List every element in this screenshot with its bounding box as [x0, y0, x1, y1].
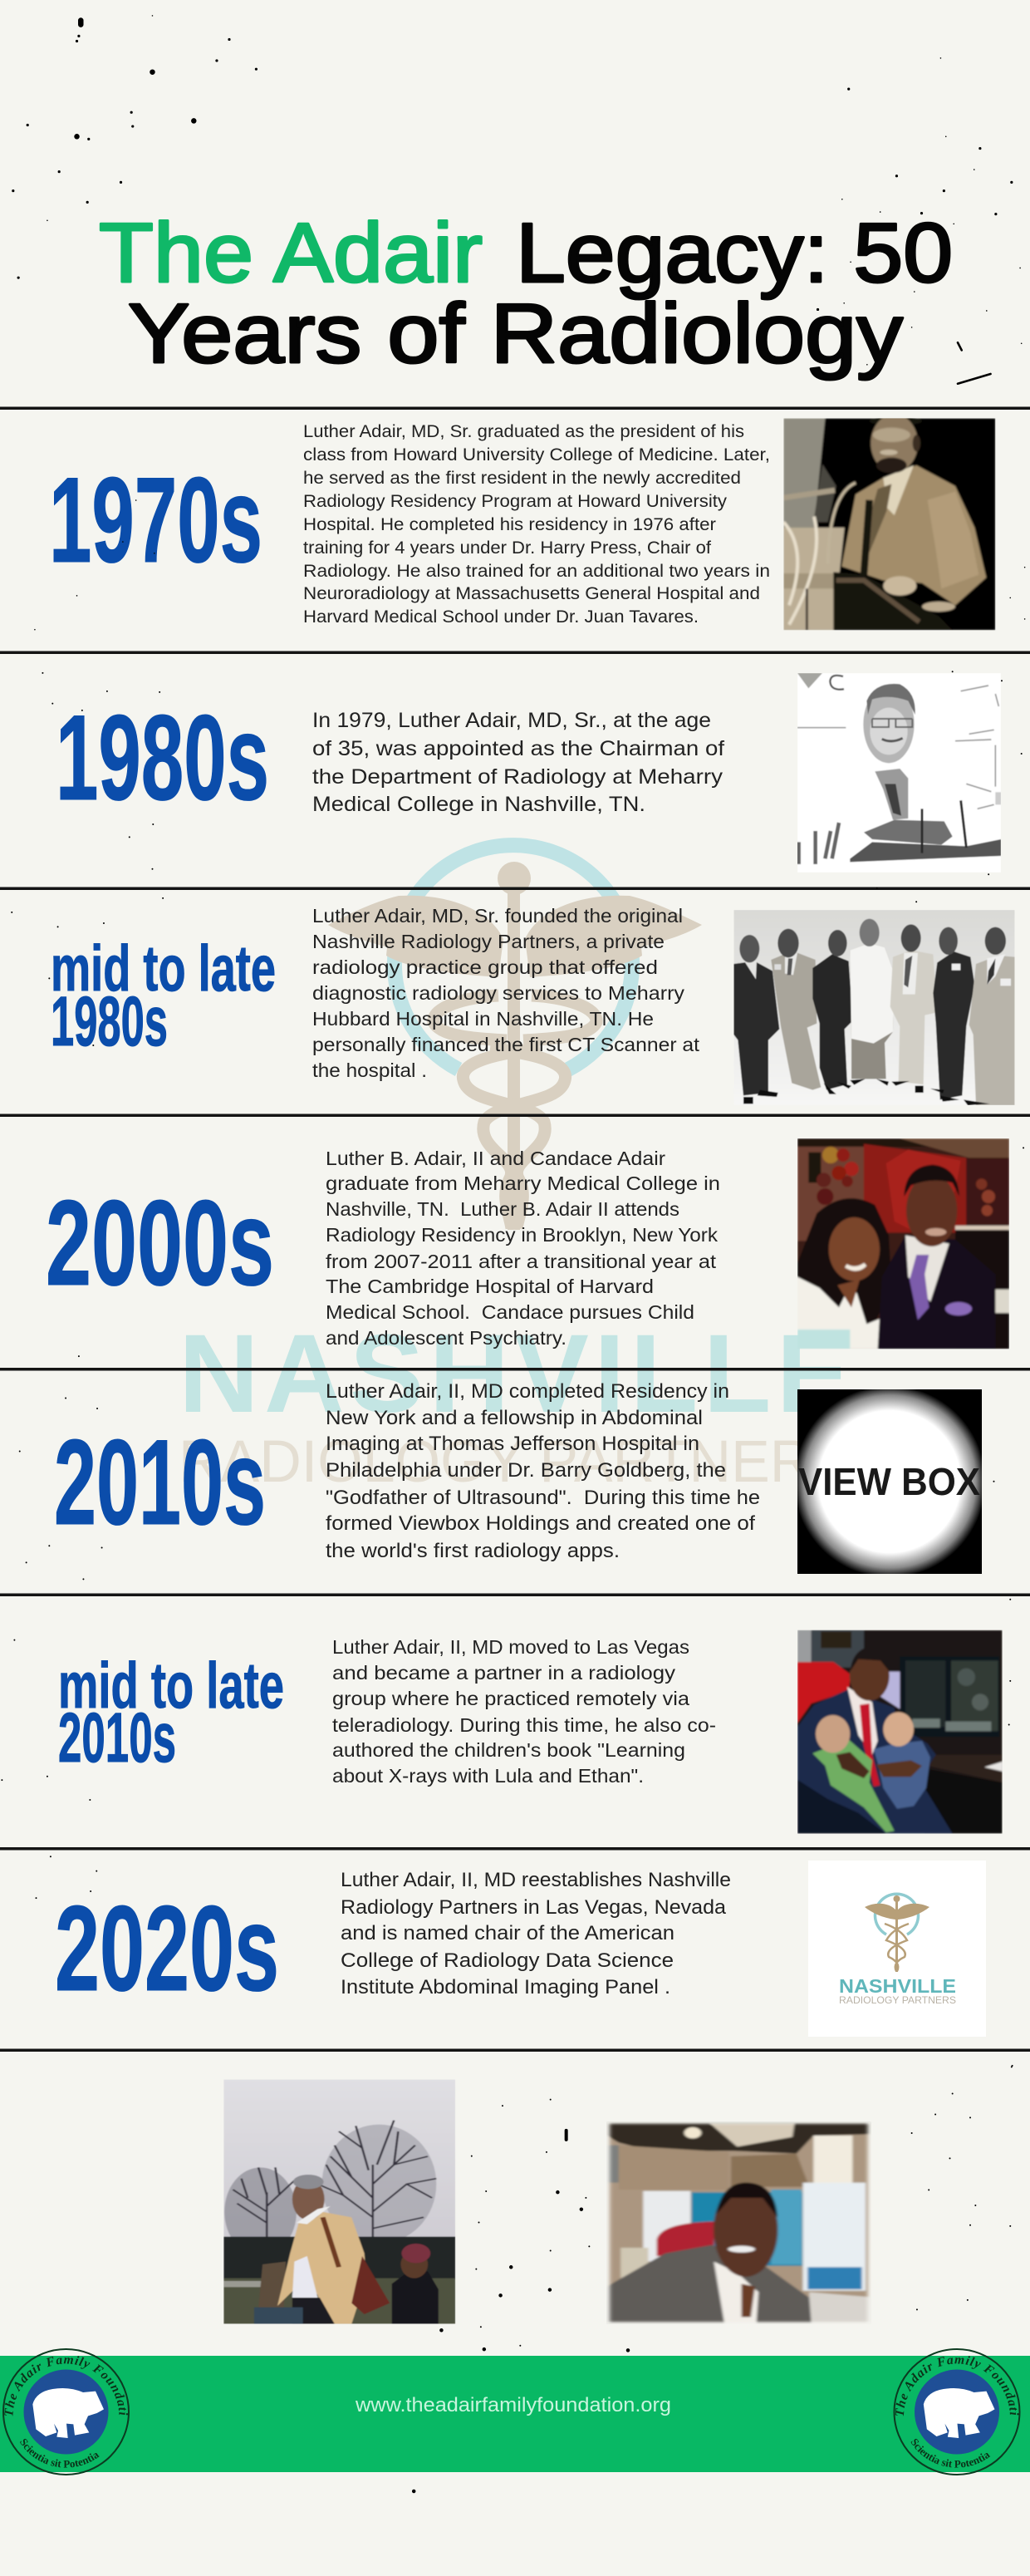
text block 2000s: from 2007-2011 after a transitional year at	[326, 1251, 716, 1272]
logo wordmark RADIOLOGY PARTNERS: RADIOLOGY PARTNERS	[839, 1994, 956, 2006]
panel: mid to late 1980s	[51, 905, 1015, 1105]
text block 2010s: the world's first radiology apps.	[326, 1540, 620, 1562]
emblem: Adair Family Foundation left: The Adair Family Foundation	[4, 2356, 128, 2416]
photo: Luther Adair at his desk	[797, 673, 1001, 873]
text block 2010s: Imaging at Thomas Jefferson Hospital in	[326, 1433, 699, 1455]
title	[99, 207, 953, 381]
text block 2020s: Institute Abdominal Imaging Panel .	[341, 1976, 670, 1998]
text block mid to late 2010s: about X-rays with Lula and Ethan".	[332, 1765, 644, 1787]
emblem: Adair Family Foundation left: Scientia sit Potentia	[20, 2438, 100, 2468]
watermark ring	[395, 845, 632, 1069]
photo: Luther Adair II with twin babies	[797, 1630, 1003, 1834]
text block mid to late 2010s: and became a partner in a radiology	[332, 1662, 675, 1684]
text block 2020s	[341, 1869, 731, 1998]
text block 1980s: the Department of Radiology at Meharry	[312, 765, 723, 789]
text block mid to late 1980s	[312, 905, 699, 1081]
text block 1980s	[312, 709, 724, 816]
speckles middle lower	[2, 1399, 1012, 2067]
text block 1970s: Harvard Medical School under Dr. Juan Tavares.	[303, 607, 699, 627]
text block 1970s: Neuroradiology at Massachusetts General Hospital and	[303, 584, 760, 603]
text block mid to late 2010s: teleradiology. During this time, he also co-	[332, 1714, 716, 1736]
section divider lines	[0, 407, 1030, 2052]
panel: 2000s	[46, 1138, 1009, 1349]
footer website url: www.theadairfamilyfoundation.org	[355, 2394, 671, 2416]
watermark caduceus	[328, 862, 702, 1230]
text block 2010s: "Godfather of Ultrasound". During this time he	[326, 1487, 760, 1509]
watermark wordmark NASHVILLE: NASHVILLE	[179, 1312, 851, 1436]
text block 2000s: Medical School. Candace pursues Child	[326, 1301, 694, 1323]
text block 2020s: Radiology Partners in Las Vegas, Nevada	[341, 1896, 727, 1919]
text block mid to late 1980s: Nashville Radiology Partners, a private	[312, 931, 665, 952]
text block 2000s: Nashville, TN. Luther B. Adair II attends	[326, 1198, 679, 1220]
text block 2010s	[326, 1380, 760, 1562]
text block 1980s: In 1979, Luther Adair, MD, Sr., at the age	[312, 709, 711, 732]
text block mid to late 2010s	[332, 1636, 716, 1787]
emblem: Adair Family Foundation right: Scientia sit Potentia	[910, 2438, 990, 2468]
text block 2000s: and Adolescent Psychiatry.	[326, 1327, 566, 1349]
text block 2020s: College of Radiology Data Science	[341, 1949, 674, 1972]
text block 2020s: Luther Adair, II, MD reestablishes Nashville	[341, 1869, 731, 1891]
panel: mid to late 2010s	[58, 1630, 1003, 1834]
logo wordmark NASHVILLE: NASHVILLE	[839, 1975, 956, 1997]
green footer band	[0, 2356, 1030, 2472]
emblem: Adair Family Foundation right	[894, 2348, 1020, 2475]
text block mid to late 1980s: Luther Adair, MD, Sr. founded the original	[312, 905, 683, 927]
text block 2010s: Philadelphia under Dr. Barry Goldberg, the	[326, 1459, 726, 1482]
text block mid to late 2010s: group where he practiced remotely via	[332, 1688, 690, 1709]
panel: 2020s	[55, 1861, 986, 2037]
speckles top	[13, 16, 1025, 630]
decade heading 1970s: 1970s	[49, 452, 262, 587]
decade heading 2000s: 2000s	[46, 1175, 274, 1310]
logo: Nashville Radiology Partners	[808, 1861, 986, 2037]
decade heading mid to late 1980s	[51, 932, 276, 1060]
logo: View Box	[797, 1389, 982, 1574]
panel: 2010s	[54, 1380, 982, 1574]
decade heading mid to late 1980s: mid to late	[51, 932, 276, 1005]
title: Years of Radiology	[128, 288, 904, 381]
text block 1980s: Medical College in Nashville, TN.	[312, 793, 645, 816]
text block mid to late 1980s: diagnostic radiology services to Meharry	[312, 982, 684, 1004]
speckles middle upper	[12, 671, 1023, 1356]
text block 1970s: Radiology. He also trained for an additional two years in	[303, 562, 770, 581]
photo: Luther and Candace Adair	[797, 1138, 1009, 1349]
title: The Adair	[99, 207, 483, 300]
text block 2010s: Luther Adair, II, MD completed Residency in	[326, 1380, 729, 1403]
text block 1970s: class from Howard University College of Medicine. Later,	[303, 445, 770, 465]
text block 2010s: New York and a fellowship in Abdominal	[326, 1407, 703, 1429]
emblem: Adair Family Foundation right: The Adair Family Foundation	[895, 2356, 1018, 2416]
decade heading 2020s: 2020s	[55, 1880, 279, 2016]
text block 2020s: and is named chair of the American	[341, 1922, 674, 1944]
text block mid to late 1980s: personally financed the first CT Scanner at	[312, 1034, 699, 1055]
text block 2010s: formed Viewbox Holdings and created one of	[326, 1512, 755, 1535]
decade heading mid to late 2010s: 2010s	[58, 1698, 176, 1777]
logo: View Box: VIEW BOX	[798, 1460, 980, 1503]
text block 2000s: The Cambridge Hospital of Harvard	[326, 1276, 654, 1297]
photo: Luther Adair II at radiology workstation	[606, 2121, 877, 2324]
title: Legacy: 50	[516, 207, 953, 300]
decade heading mid to late 1980s: 1980s	[51, 982, 168, 1060]
decade heading 1980s: 1980s	[56, 690, 269, 825]
text block 2000s: graduate from Meharry Medical College in	[326, 1172, 720, 1194]
text block 2000s: Luther B. Adair, II and Candace Adair	[326, 1148, 665, 1169]
text block 2000s: Radiology Residency in Brooklyn, New York	[326, 1224, 718, 1246]
text block 1980s: of 35, was appointed as the Chairman of	[312, 737, 724, 760]
text block 1970s: training for 4 years under Dr. Harry Press, Chair of	[303, 538, 711, 558]
emblem: Adair Family Foundation left	[2, 2348, 130, 2475]
photo: Luther Adair at the podium	[783, 414, 995, 630]
watermark: Nashville Radiology Partners logo	[179, 845, 851, 1495]
photo: group of seven physicians	[733, 910, 1015, 1105]
speckles bottom	[414, 2066, 1013, 2491]
text block mid to late 2010s: authored the children's book "Learning	[332, 1739, 685, 1761]
panel: 1970s	[49, 414, 995, 630]
text block mid to late 2010s: Luther Adair, II, MD moved to Las Vegas	[332, 1636, 689, 1658]
text block 1970s: Luther Adair, MD, Sr. graduated as the president of his	[303, 422, 744, 441]
text block mid to late 1980s: radiology practice group that offered	[312, 956, 658, 978]
text block 1970s: Radiology Residency Program at Howard University	[303, 492, 728, 511]
text block 1970s: Hospital. He completed his residency in 1976 after	[303, 515, 716, 534]
text block mid to late 1980s: Hubbard Hospital in Nashville, TN. He	[312, 1008, 654, 1030]
panel: 1980s	[56, 673, 1001, 873]
logo ring and caduceus	[865, 1894, 929, 1972]
text block 1970s	[303, 422, 770, 627]
decade heading mid to late 2010s: mid to late	[58, 1649, 284, 1722]
text block mid to late 1980s: the hospital .	[312, 1059, 427, 1081]
text block 2000s	[326, 1148, 720, 1349]
decade heading 2010s: 2010s	[54, 1414, 266, 1550]
text block 1970s: he served as the first resident in the newly accredited	[303, 469, 741, 488]
watermark wordmark RADIOLOGY PARTNERS: RADIOLOGY PARTNERS	[179, 1429, 851, 1495]
decade heading mid to late 2010s	[58, 1649, 284, 1777]
photo: Luther Adair Sr. outdoors	[223, 2079, 455, 2324]
